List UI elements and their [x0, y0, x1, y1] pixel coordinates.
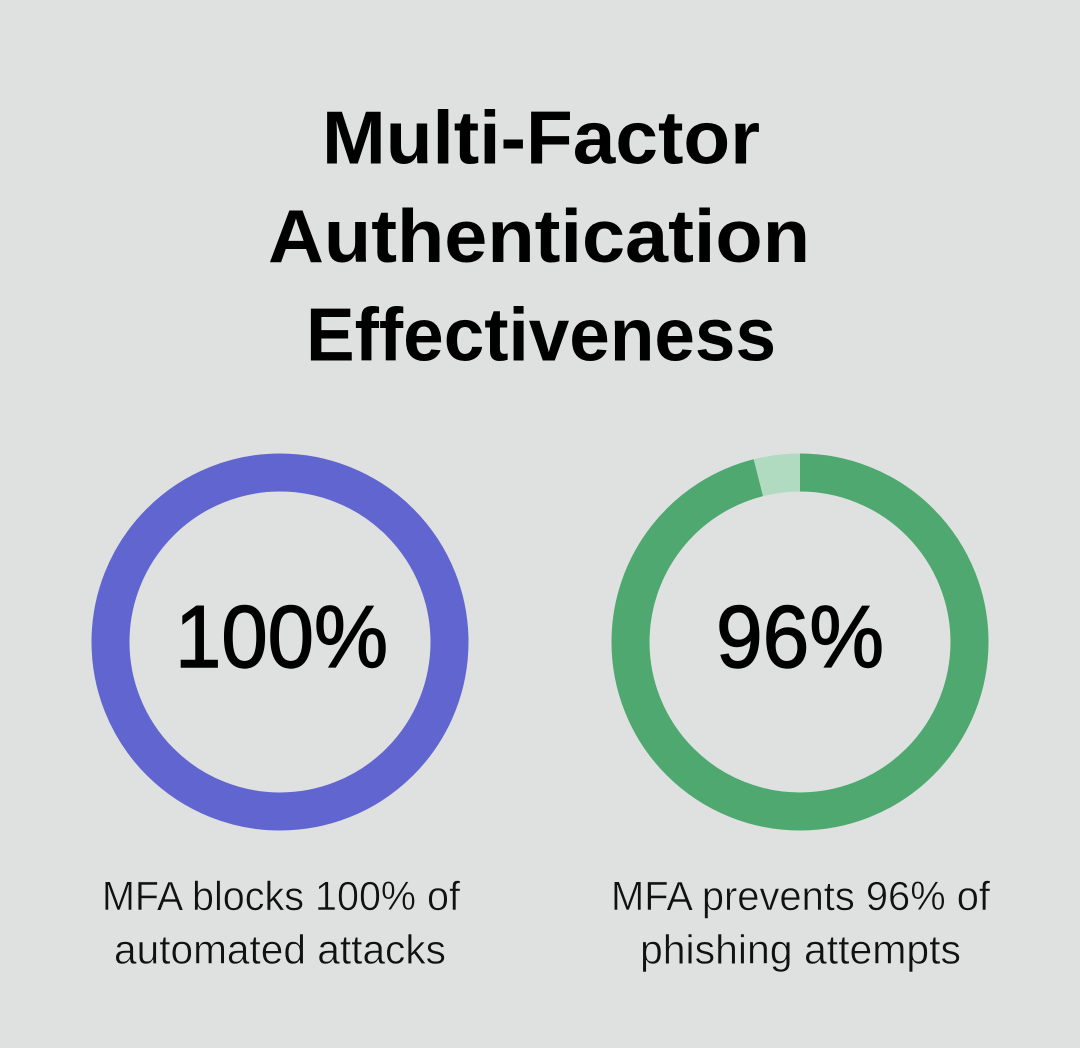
caption: automated attacks: MFA blocks 100% of: [102, 873, 461, 919]
title: Authentication: [268, 194, 810, 278]
value: 100%: 100%: [175, 587, 388, 686]
title: [268, 96, 810, 376]
panel: phishing attempts stat: [611, 472, 991, 972]
panel: automated attacks stat: [102, 472, 461, 972]
caption: phishing attempts: [611, 873, 991, 972]
caption: automated attacks: automated attacks: [114, 926, 446, 972]
title: Multi-Factor: [322, 96, 760, 180]
value: 96%: 96%: [716, 587, 884, 686]
donut chart: 96%: [630, 472, 970, 812]
caption: phishing attempts: MFA prevents 96% of: [611, 873, 991, 919]
caption: phishing attempts: phishing attempts: [640, 926, 961, 972]
donut chart: 100%: [110, 472, 450, 812]
caption: automated attacks: [102, 873, 461, 972]
title: Effectiveness: [306, 292, 776, 376]
